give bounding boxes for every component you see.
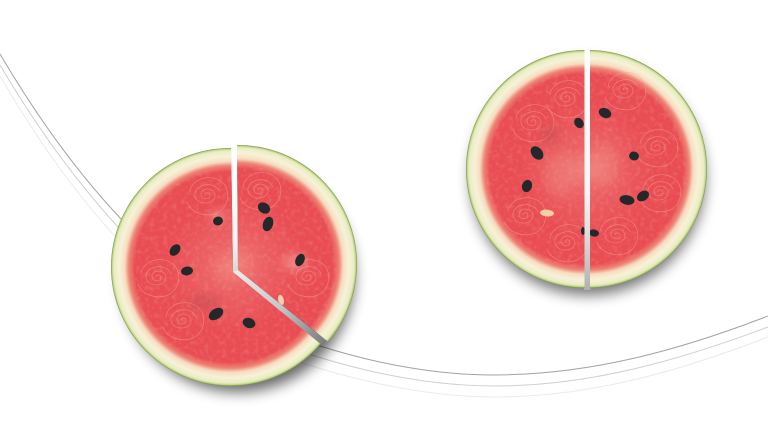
drop shadow	[122, 160, 354, 392]
centre cut gap	[584, 48, 590, 290]
cut gaps	[231, 146, 325, 344]
removed wedge slice	[237, 145, 357, 342]
right half	[590, 50, 707, 288]
seeds	[588, 106, 651, 237]
watermelon pie: split in half	[466, 48, 707, 295]
seeds	[167, 215, 257, 330]
large slice	[111, 148, 320, 386]
curved guide lines	[0, 54, 768, 397]
watermelon pie: small slice removed	[111, 145, 357, 392]
left half	[466, 50, 584, 288]
seeds	[258, 202, 305, 266]
drop shadow	[471, 61, 705, 295]
seeds	[520, 116, 586, 235]
